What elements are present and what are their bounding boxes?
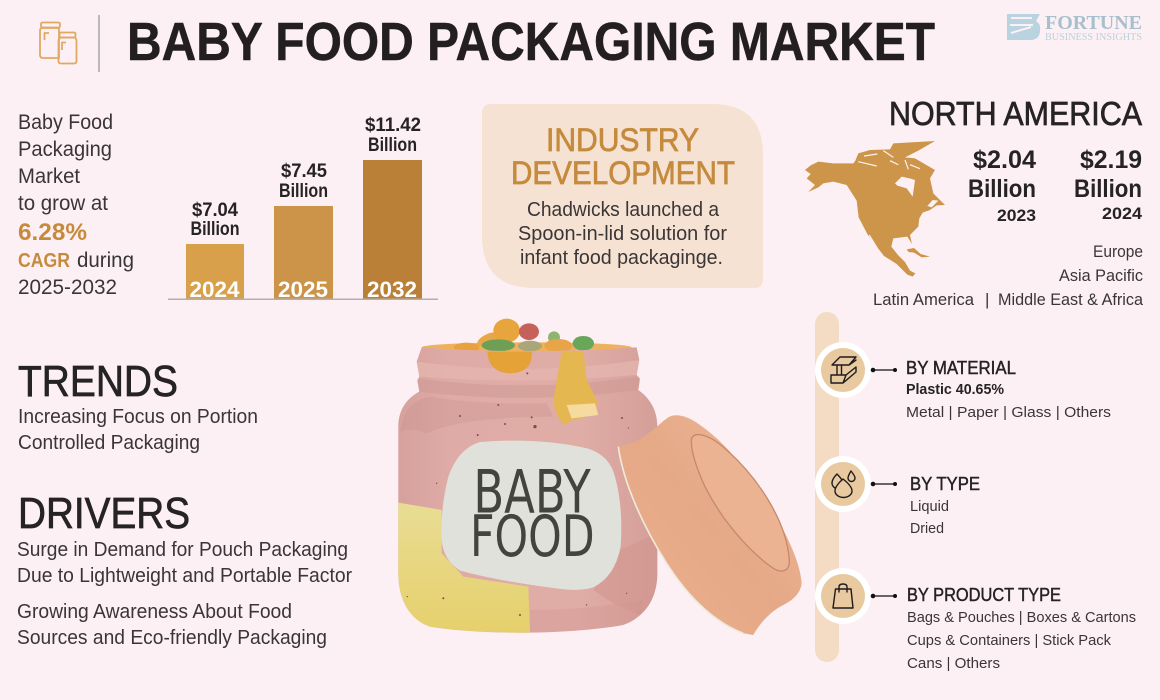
illustration: baby food jar with lid [398,319,802,635]
stat: north america 2024 [1074,146,1143,223]
text block: drivers: Surge in Demand for Pouch Packaging [17,538,348,561]
text block: drivers [17,489,352,649]
stat: north america 2023: $2.04 [973,146,1036,174]
text block: by material [906,358,1111,421]
bar 2024 [186,200,244,302]
timeline rail [815,312,839,662]
stat: north america 2024: 2024 [1102,204,1143,223]
logo: Fortune Business Insights [1007,12,1142,43]
text block: CAGR growth: Baby Food [18,111,113,134]
heading: north america: NORTH AMERICA [889,95,1142,132]
map: north america [805,141,945,277]
bar 2024: $7.04 [192,200,238,221]
yellow drips [487,352,532,373]
text block: CAGR growth: Market [18,165,80,188]
text block: CAGR growth [18,111,134,299]
text block: CAGR growth: 6.28% [18,219,87,246]
heading: trends: TRENDS [18,357,178,406]
text block: other regions: | [985,290,989,309]
heading: industry development: DEVELOPMENT [511,155,735,191]
bar 2025: 2025 [278,277,328,302]
text block: drivers: Due to Lightweight and Portable Factor [17,564,352,587]
panel: industry development [482,104,763,288]
text block: CAGR growth: Packaging [18,138,112,161]
text block: by product type: Cans | Others [907,655,1000,672]
icon: liquid drops type [815,456,897,512]
logo: Fortune Business Insights: FORTUNE [1045,12,1142,34]
header divider [98,15,100,72]
title: BABY FOOD PACKAGING MARKET [127,12,935,72]
text block: by product type [907,585,1136,672]
label: baby food: BABY [473,458,591,527]
connector [871,482,897,486]
text block: by type: Dried [910,520,944,537]
label: baby food: FOOD [470,503,595,570]
text block: trends: Controlled Packaging [18,431,200,454]
text block: CAGR growth: to grow at [18,192,108,215]
icon: shopping bag product type [815,568,897,624]
yellow panel [398,503,530,633]
heading: drivers: DRIVERS [18,489,190,538]
text block: drivers: Growing Awareness About Food [17,600,292,623]
logo: Fortune Business Insights: BUSINESS INSIGHTS [1045,32,1142,43]
text block: other regions: Middle East & Africa [998,290,1144,309]
text block: by material: Metal | Paper | Glass | Others [906,404,1111,421]
text block: by product type: Cups & Containers | Stick Pack [907,632,1111,649]
connector [871,368,897,372]
stat: north america 2023 [968,146,1036,225]
text block: by type: Liquid [910,498,949,515]
text block: by product type: Bags & Pouches | Boxes & Cartons [907,609,1136,626]
bar 2024: 2024 [190,277,240,302]
text block: by material: Plastic 40.65% [906,381,1004,398]
jar body [398,347,657,633]
text block: by material: BY MATERIAL [906,358,1016,378]
text block: CAGR growth: CAGR [18,250,70,272]
stat: north america 2024: Billion [1074,175,1142,203]
text block: CAGR growth: 2025-2032 [18,276,117,299]
bar 2032: 2032 [367,277,417,302]
connector [871,594,897,598]
neck shading [417,377,639,398]
stat: north america 2023: 2023 [997,206,1036,225]
text block: trends: Increasing Focus on Portion [18,405,258,428]
label: baby food [441,441,621,590]
bar 2024: Billion [190,219,240,240]
text block: CAGR growth: during [77,249,134,272]
bar 2032: Billion [368,135,417,156]
jar lid [618,415,802,635]
text block: development detail: Chadwicks launched a [527,199,720,221]
bar chart: market size [168,115,438,302]
icon: baby food jars [40,22,76,64]
body shading [401,397,553,433]
bar 2025 [274,161,333,302]
text block: development detail: infant food packaginge. [520,247,723,269]
specks [407,372,629,616]
heading: industry development: INDUSTRY [546,122,699,158]
heading: industry development [511,122,735,191]
text block: development detail: Spoon-in-lid solution for [518,223,727,245]
text block: other regions: Asia Pacific [1059,266,1143,285]
bar 2032 [363,115,422,302]
bar 2025: Billion [279,181,328,202]
icon: steel beam material [815,342,897,398]
bar 2032: $11.42 [365,115,421,136]
text block: other regions: Europe [1093,242,1143,261]
stat: north america 2024: $2.19 [1080,146,1142,174]
jar contents [422,319,632,353]
text block: drivers: Sources and Eco-friendly Packaging [17,626,327,649]
text block: by type [910,474,980,537]
bar 2025: $7.45 [281,161,327,182]
text block: trends [18,357,258,454]
text block: by type: BY TYPE [910,474,980,494]
stat: north america 2023: Billion [968,175,1036,203]
text block: other regions [873,242,1144,309]
text block: other regions: Latin America [873,290,975,309]
text block: by product type: BY PRODUCT TYPE [907,585,1061,605]
text block: development detail [518,199,727,269]
